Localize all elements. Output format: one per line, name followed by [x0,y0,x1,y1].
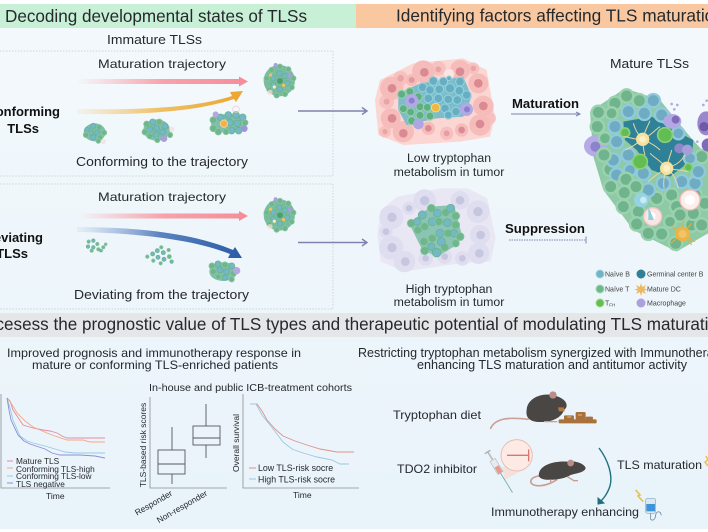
text: restricting tryptophan heading: enhancing TLS maturation and antitumor activity [417,358,688,372]
chart: survival by TLS type [1,394,110,501]
legend: TLS types: Conforming TLS-high [16,464,95,474]
legend: cell types: FH [609,302,615,308]
panel: conforming TLSs [0,51,333,176]
label: mature TLSs: Mature TLSs [610,57,689,71]
illustration: low tryptophan tumor [375,58,496,145]
illustration: high tryptophan tumor [377,188,496,272]
arrow: TLS maturation to immunotherapy [598,448,611,504]
legend: risk groups: Low TLS-risk socre [258,463,333,473]
arrow: blue deviating trajectory [77,227,242,258]
axis label: time right: Time [293,490,312,500]
arrow: pink maturation trajectory second [77,211,248,221]
text: maturation trajectory: Maturation trajectory [98,57,226,71]
curve: mature TLS [7,398,105,438]
legend: cell types: Naïve B [605,272,630,278]
arrow: deviating to high tryptophan [298,239,367,246]
axis label: overall survival: Overall survival [231,414,241,472]
arrow: conforming to low tryptophan [298,108,367,114]
legend: TLS types: TLS negative [16,479,65,489]
axis labels: response groups: Non-responder [155,488,209,525]
text: high tryptophan metabolism: metabolism in tumor [394,295,504,309]
legend: cell types: T [605,300,609,308]
arrow: suppression blocked [509,236,586,244]
label: suppression: Suppression [505,222,585,236]
curve: conforming TLS-high [7,398,105,442]
icon: mature TLS mini [264,63,296,98]
curve: low risk [250,404,354,452]
arrow: maturation [511,112,580,116]
icon: lightning right edge [705,456,708,466]
text: immunotherapy enhancing: Immunotherapy enhancing [491,505,639,519]
arrow: pink maturation trajectory [77,76,248,86]
chart: overall survival by risk [231,394,359,500]
text: conforming to the trajectory: Conforming to the trajectory [76,155,249,169]
box: non-responder [193,404,220,458]
text: tryptophan diet: Tryptophan diet [393,408,482,422]
text: low tryptophan metabolism: metabolism in tumor [394,165,504,179]
box: responder [158,427,185,484]
label: maturation: Maturation [512,97,579,111]
axis label: time: Time [46,491,65,501]
text: improved prognosis heading: mature or conforming TLS-enriched patients [32,358,278,372]
text: high tryptophan metabolism: High tryptophan [406,282,493,296]
curve: conforming TLS-low [7,398,105,453]
arrow: orange conforming trajectory [77,91,243,114]
icon: syringe with inhibition symbol [484,440,532,494]
legend: TLS types: Mature TLS [16,456,60,466]
legend: TLS types [7,456,95,489]
curve: high risk [250,404,349,464]
icon: treated mouse [531,460,586,486]
icon: lightning and IV bag [636,490,661,520]
legend: cell types: Germinal center B [647,272,704,278]
label: ICB cohorts: In-house and public ICB-treatment cohorts [149,383,352,394]
legend: cell types: Mature DC [647,286,681,294]
text: low tryptophan metabolism: Low tryptophan [407,151,491,165]
icons: deviating immature clusters [86,239,240,282]
text: TDO2 inhibitor: TDO2 inhibitor [397,462,477,476]
legend: risk groups [249,463,335,484]
text: TLS maturation: TLS maturation [617,458,702,472]
icon: mouse eating food [491,391,597,428]
icon: mature TLS mini second [264,197,296,232]
chart: risk score box plot [133,397,227,525]
legend: cell types: Naïve T [605,286,630,294]
legend: TLS types: Conforming TLS-low [16,471,92,481]
label: immature TLSs: Immature TLSs [107,33,202,47]
text: maturation trajectory second: Maturation trajectory [98,190,226,204]
label: conforming TLSs: TLSs [7,121,39,136]
legend: cell types: Macrophage [647,300,686,308]
text: improved prognosis heading: Improved prognosis and immunotherapy response in [7,346,301,360]
axis labels: response groups: Responder [133,488,174,518]
axis label: risk scores: TLS-based risk scores [138,403,148,487]
panel: deviating TLSs [0,184,333,309]
header: decoding developmental states: Decoding developmental states of TLSs [5,6,307,26]
legend: cell types [596,270,704,308]
icons: conforming immature clusters [83,106,248,144]
legend: risk groups: High TLS-risk socre [258,474,335,484]
curve: TLS negative [7,398,105,458]
text: deviating from the trajectory: Deviating from the trajectory [74,288,250,302]
illustration: large mature TLS [584,88,708,252]
